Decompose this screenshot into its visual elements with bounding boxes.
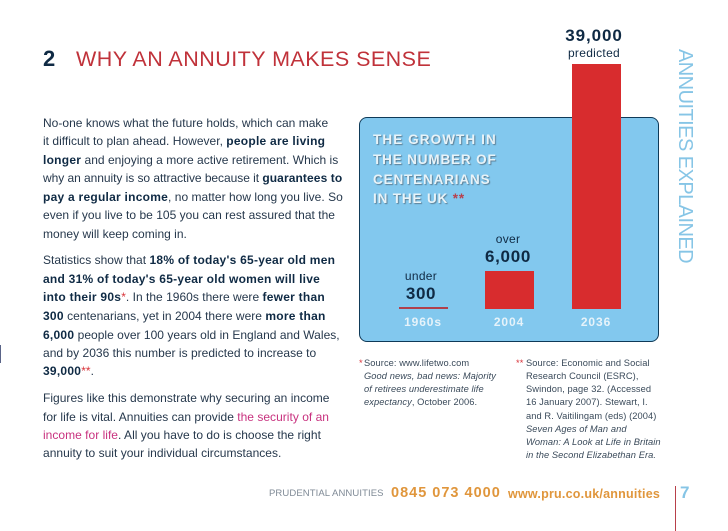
body text: paragraph 2: 39,000**. <box>43 364 94 378</box>
chart heading: IN THE UK ** <box>373 191 465 206</box>
footnote: double asterisk: and R. Vaitilingam (eds) (2004) <box>526 411 656 421</box>
footer divider <box>675 486 676 531</box>
footnote: single asterisk: * <box>359 358 363 368</box>
footer: website: www.pru.co.uk/annuities <box>508 487 660 501</box>
body text: paragraph 1: even if you live to be 105 you can rest assured that the <box>43 208 335 222</box>
label: over 6,000: 6,000 <box>485 247 531 266</box>
footer: phone: 0845 073 4000 <box>391 485 501 501</box>
body text: paragraph 3: for life is vital. Annuities can provide the security of an <box>43 410 329 424</box>
bar: 1960s <box>399 307 448 309</box>
footnote: single asterisk: of retirees underestimate life <box>364 384 484 394</box>
label: 39,000 predicted: predicted <box>568 46 620 60</box>
body text: paragraph 2: and by 2036 this number is predicted to increase to <box>43 346 316 360</box>
footnote: single asterisk: Good news, bad news: Majority <box>364 371 496 381</box>
label: over 6,000: over <box>496 232 520 246</box>
label: under 300 <box>405 269 437 303</box>
axis labels: 1960s <box>404 315 442 329</box>
vertical title: ANNUITIES EXPLAINED <box>674 49 696 263</box>
label: 39,000 predicted <box>565 26 623 60</box>
footnote: single asterisk <box>359 358 496 407</box>
body text: paragraph 2: 300 centenarians, yet in 2004 there were more than <box>43 309 326 323</box>
footnote: single asterisk: Source: www.lifetwo.com <box>364 358 469 368</box>
body text: paragraph 3: annuity to suit your individual circumstances. <box>43 446 281 460</box>
axis labels: 2004 <box>494 315 524 329</box>
body text: paragraph 2 <box>43 253 340 378</box>
body text: paragraph 1: No-one knows what the future holds, which can make <box>43 116 328 130</box>
bar: 2004 <box>485 271 534 309</box>
body text: paragraph 3 <box>43 391 330 460</box>
label: 39,000 predicted: 39,000 <box>565 26 623 45</box>
chart heading: CENTENARIANS <box>373 172 490 187</box>
footer: brand: PRUDENTIAL ANNUITIES <box>269 488 384 499</box>
body text: paragraph 2: into their 90s*. In the 1960s there were fewer than <box>43 290 325 304</box>
label: under 300: 300 <box>406 284 436 303</box>
body text: paragraph 2: and 31% of today's 65-year old women will live <box>43 272 320 286</box>
left edge mark <box>0 345 1 363</box>
body text: paragraph 3: Figures like this demonstrate why securing an income <box>43 391 330 405</box>
footnote: double asterisk: 16 January 2007). Stewart, I. <box>526 397 648 407</box>
axis labels: 2036 <box>581 315 611 329</box>
footnote: double asterisk: in the Second Elizabethan Era. <box>526 450 656 460</box>
body text: paragraph 1: pay a regular income, no matter how long you live. So <box>43 190 343 204</box>
body text: paragraph 1: why an annuity is so attractive because it guarantees to <box>43 171 342 185</box>
body text: paragraph 3: income for life. All you have to do is choose the right <box>43 428 321 442</box>
axis labels <box>404 315 611 329</box>
panel: centenarian growth chart <box>359 117 659 342</box>
footnote: double asterisk: Swindon, page 32. (Accessed <box>526 384 651 394</box>
label: over 6,000 <box>485 232 531 266</box>
body text: paragraph 1: money will keep coming in. <box>43 227 187 241</box>
bar: 2036 <box>572 64 621 309</box>
label: under 300: under <box>405 269 437 283</box>
footnote: double asterisk <box>516 358 661 460</box>
body text: paragraph 1 <box>43 116 343 241</box>
footnote: double asterisk: Seven Ages of Man and <box>526 424 627 434</box>
body text: paragraph 1: it difficult to plan ahead. However, people are living <box>43 134 325 148</box>
heading: WHY AN ANNUITY MAKES SENSE <box>76 47 431 71</box>
footnote: double asterisk: Woman: A Look at Life in Britain <box>526 437 661 447</box>
chart heading <box>373 132 497 206</box>
footnote: double asterisk: Source: Economic and Social <box>526 358 650 368</box>
footnote: double asterisk: ** <box>516 358 523 368</box>
chart heading: THE NUMBER OF <box>373 152 497 167</box>
body text: paragraph 2: 6,000 people over 100 years old in England and Wales, <box>43 328 340 342</box>
footnote: single asterisk: expectancy, October 2006. <box>364 397 477 407</box>
chart heading: THE GROWTH IN <box>373 132 497 147</box>
body text: paragraph 1: longer and enjoying a more active retirement. Which is <box>43 153 338 167</box>
section number: 2 <box>43 46 55 71</box>
footnote: double asterisk: Research Council (ESRC), <box>526 371 638 381</box>
page number: 7 <box>680 483 689 502</box>
body text: paragraph 2: Statistics show that 18% of today's 65-year old men <box>43 253 335 267</box>
